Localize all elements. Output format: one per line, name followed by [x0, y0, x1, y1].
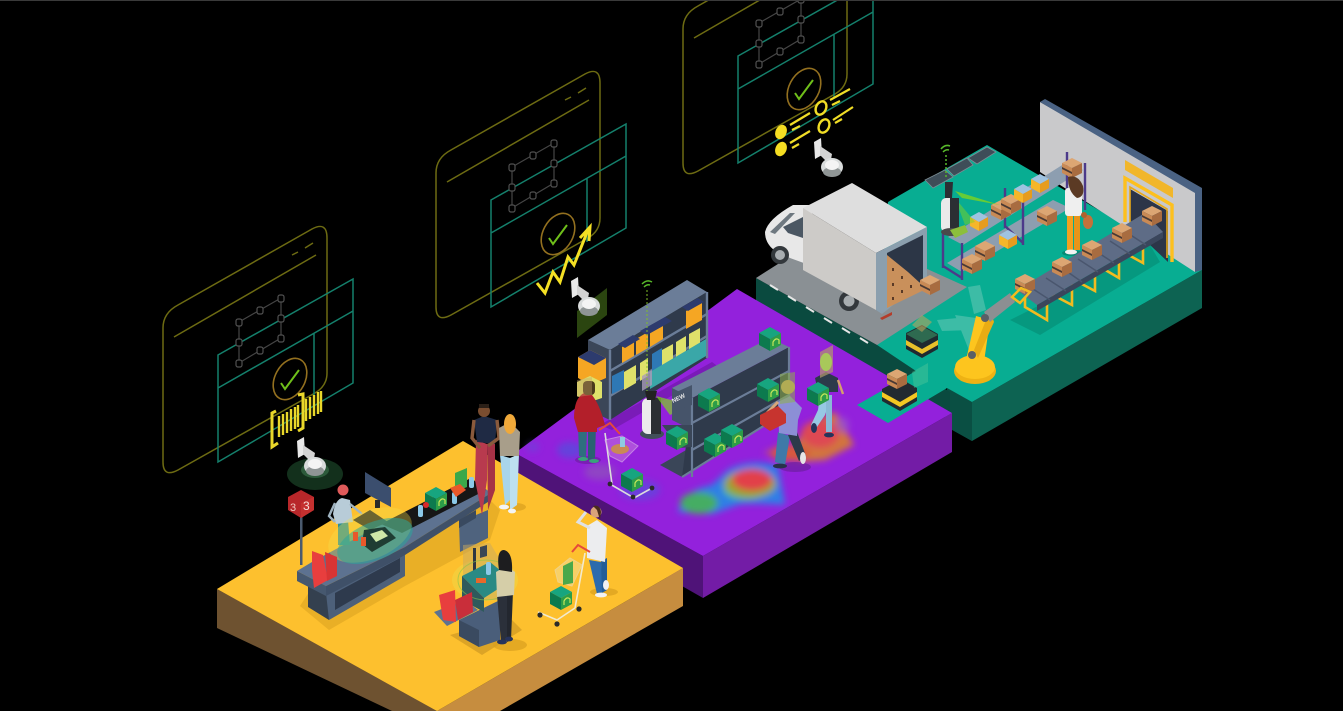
- check badge: [780, 63, 828, 115]
- left shelf items: [578, 350, 606, 385]
- conveyor belt: [1010, 206, 1163, 335]
- wireframe panel: price trend: [436, 71, 626, 318]
- platform: purple side faces: [515, 413, 952, 598]
- POS monitor: [353, 472, 391, 530]
- self checkout kiosk: [434, 543, 514, 647]
- store shelf shadow: [600, 362, 720, 430]
- checkout shadow: [300, 480, 500, 630]
- scanner: [353, 527, 396, 552]
- shopping cart: [537, 545, 590, 627]
- shopper in red with cart: [574, 377, 654, 499]
- lane sign: [288, 490, 314, 565]
- check badge: [534, 208, 582, 260]
- lane sign: 3: [290, 502, 296, 514]
- roller door: [1125, 160, 1173, 262]
- robot arm: [954, 288, 1030, 384]
- floor vents: [925, 147, 996, 188]
- bags at kiosk: [439, 590, 473, 622]
- warehouse shelving: [943, 152, 1085, 280]
- zigzag arrow: [537, 227, 590, 293]
- wifi icon store: [642, 281, 652, 402]
- cart: [599, 423, 654, 499]
- back wall: [1040, 99, 1202, 272]
- items on belt: [418, 468, 474, 517]
- cashier: [329, 484, 362, 545]
- top edge: [0, 0, 1343, 1]
- checkout yellow scan glow: [320, 496, 420, 574]
- heat map: [527, 412, 854, 514]
- products upper row: [622, 302, 702, 363]
- ghost robot arm motion: [937, 285, 990, 358]
- camera: warehouse: [814, 138, 843, 177]
- checkout teal scan glow: [331, 508, 419, 574]
- teal loading tab: [857, 371, 947, 423]
- platform: yellow side faces: [217, 568, 683, 711]
- NEW sign: [671, 385, 692, 412]
- wireframe panel: barcode scan: [163, 226, 353, 473]
- NEW sign: NEW: [671, 393, 687, 405]
- delivery truck: [765, 183, 940, 320]
- worker and dog: [1062, 176, 1093, 256]
- self checkout kiosk shadow: [450, 618, 522, 655]
- lane sign: 3: [303, 499, 310, 513]
- woman at kiosk: [493, 550, 527, 651]
- camera backdrop store: [577, 288, 607, 338]
- store robot: [640, 391, 690, 439]
- products mid row: [624, 328, 700, 390]
- platform: warehouse floor: [857, 145, 1202, 423]
- man in tank top: [472, 404, 499, 515]
- platform: warehouse side walls: [756, 270, 1202, 441]
- shopper with basket: [760, 372, 811, 472]
- cargo box: [803, 183, 927, 253]
- store shelf back: [577, 280, 707, 420]
- check badge: [266, 353, 314, 405]
- products low row: [650, 339, 706, 389]
- cab: [765, 205, 812, 266]
- inventory robot with scan beams: [941, 182, 1000, 238]
- camera glow: [287, 458, 343, 490]
- blonde woman: [499, 414, 526, 513]
- red shopping bags: [312, 551, 337, 588]
- woman on phone with cart: [537, 506, 618, 627]
- camera: checkout: [297, 437, 326, 476]
- camera: store: [571, 277, 600, 316]
- store shelf front: [660, 327, 790, 477]
- wireframe panel: checklist: [683, 0, 873, 174]
- self checkout kiosk glow: [452, 559, 518, 601]
- barcode icon: [272, 391, 321, 447]
- wifi icon warehouse: [941, 145, 950, 178]
- warehouse delivery robots: [906, 315, 938, 358]
- loading robot: [882, 363, 928, 411]
- checklist icons: [773, 89, 853, 158]
- shopper walking: [807, 345, 843, 437]
- road: [756, 250, 967, 345]
- leg: [459, 510, 488, 552]
- platform: purple floor: [515, 289, 952, 556]
- rear wheel: [839, 291, 859, 311]
- platform: yellow floor: [217, 441, 683, 711]
- checkout counter: [297, 478, 491, 620]
